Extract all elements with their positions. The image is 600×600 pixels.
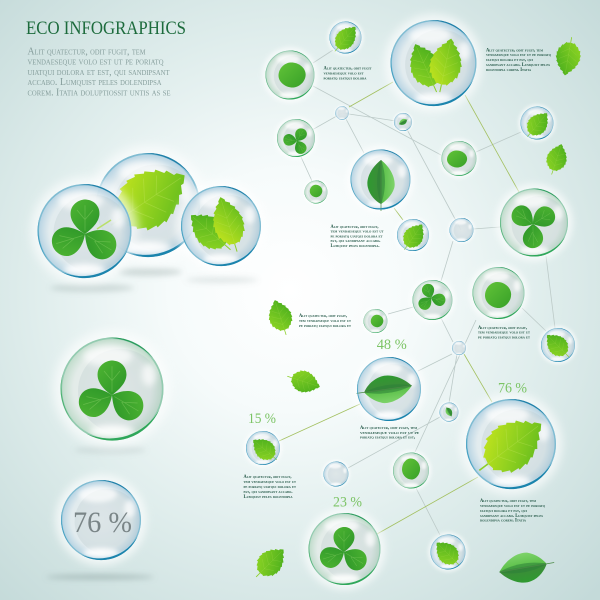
caption: under 48 percent: Alit quatectur, odit fugit, tem: [360, 426, 417, 431]
intro paragraph: corem. Itatia doluptiossit untis as se: [28, 87, 170, 98]
caption: under 76 percent: vendaeseque volo est ut pe poriatq: [480, 504, 546, 509]
free leaf: top right: [553, 35, 584, 78]
caption: top right: [486, 48, 552, 73]
caption: under 76 percent: sandipsant accabo. Lumquist peles: [480, 514, 543, 519]
intro paragraph: accabo. Lumquist peles dolendipsa: [28, 77, 162, 88]
network bubble: green leaf lower: [390, 450, 432, 491]
network bubble: small clover: [274, 116, 318, 160]
network bubble: lower leaf: [395, 217, 431, 255]
free leaf: bottom: [247, 541, 292, 586]
caption: top right: uiatqui dolora et est, qui: [486, 58, 534, 63]
connector lines: [279, 50, 555, 535]
bubble: right with two leaves: [175, 180, 267, 272]
caption: centre left: pe poriatq uiatqui dolora et: [299, 324, 351, 329]
caption: centre left: tem vendaeseque volo est ut: [299, 319, 351, 324]
caption: top right: sandipsant accabo. Lumquist peles: [486, 63, 550, 68]
caption: under 15 percent: est, qui sandipsant accabo.: [244, 490, 292, 495]
network node: hub: [451, 340, 467, 356]
caption: under 48 percent: [360, 426, 419, 440]
network bubble: small green middle: [362, 307, 389, 335]
caption: top right: dolendipsa corem. Itatia: [486, 68, 532, 73]
intro paragraph: uiatqui dolora et est, qui sandipsant: [28, 67, 170, 78]
network bubble: 76 percent birch leaf: [460, 393, 562, 495]
caption: under 15 percent: Lumquist peles dolendipsa: [244, 495, 293, 500]
intro paragraph: Alit quatectur, odit fugit, tem: [28, 46, 146, 58]
bubble: large clover: [53, 330, 171, 448]
caption: middle: Alit quatectur, odit fugit,: [330, 225, 378, 230]
caption: under 15 percent: tem vendaeseque volo est ut: [244, 480, 296, 485]
caption: under 76 percent: uiatqui dolora et est, qui: [480, 509, 528, 514]
network bubble: dark leaf: [346, 145, 415, 214]
network node: tiny empty: [334, 105, 350, 121]
intro paragraph: [28, 46, 170, 98]
caption: under 76 percent: [480, 499, 546, 524]
caption: middle: Lumquist peles dolendipsa.: [330, 244, 380, 249]
bubble: 76 percent: 76 %: [73, 506, 132, 539]
caption: top centre: [324, 66, 372, 82]
network bubble: small green: [303, 179, 329, 205]
caption: under 15 percent: [244, 475, 296, 500]
caption: under 48 percent: vendaeseque volo est ut pe: [360, 431, 419, 436]
caption: middle: tem vendaeseque volo est ut: [330, 230, 384, 234]
caption: centre left: [299, 314, 351, 329]
free leaf: centre: [264, 297, 297, 339]
network bubble: green leaf left: [262, 47, 318, 103]
network bubble: green blob leaf: [439, 139, 479, 178]
network bubble: 23 percent clover: [303, 508, 386, 590]
bubble: large back with birch leaf: [89, 146, 207, 264]
network bubble: bottom leaf: [428, 532, 468, 573]
caption: under 15 percent: pe poriatq uiatqui dolora et: [244, 485, 296, 490]
percent label: 48: 48 %: [377, 337, 407, 353]
percent label: 76: 76 %: [498, 380, 527, 396]
caption: centre right: [478, 326, 530, 340]
percent label: 23: 23 %: [333, 494, 362, 510]
caption: middle: [330, 225, 384, 249]
network bubble: right leaf: [518, 104, 556, 143]
intro paragraph: vendaeseque volo est ut pe poriatq: [28, 56, 164, 68]
title: ECO INFOGRAPHICS: [26, 19, 186, 39]
network bubble: right lower leaf: [539, 326, 577, 364]
network bubble: right clover: [495, 184, 573, 261]
caption: under 76 percent: Alit quatectur, odit fugit, tem: [480, 499, 536, 504]
caption: top right: Alit quatectur, odit fugit, tem: [486, 48, 543, 54]
network bubble: top small leaf: [327, 19, 364, 57]
caption: centre left: Alit quatectur, odit fugit,: [299, 314, 347, 319]
network bubble: mid clover: [410, 277, 455, 323]
caption: middle: est, qui sandipsant accabo.: [330, 239, 380, 244]
network bubble: tiny dark leaf lower: [438, 401, 460, 423]
caption: centre right: tem vendaeseque volo est ut: [478, 330, 530, 336]
network bubble: 48 percent dark leaf: [353, 353, 425, 425]
free leaf: horizontal: [284, 366, 323, 397]
percent label: 15: 15 %: [248, 411, 276, 427]
caption: top centre: Alit quatectur, odit fugit: [324, 66, 372, 72]
caption: top centre: vendaeseque volo est: [324, 72, 364, 76]
caption: centre right: Alit quatectur, odit fugit,: [478, 326, 527, 331]
caption: top right: vendaeseque volo est ut pe poriatq: [486, 53, 552, 58]
bubble: 76 percent: [55, 474, 147, 566]
caption: centre right: pe poriatq uiatqui dolora et: [478, 336, 530, 340]
caption: under 76 percent: dolendipsa corem. Itatia: [480, 518, 527, 524]
network bubble: tiny dark leaf: [393, 112, 413, 132]
free leaf: right: [542, 141, 571, 178]
ground shadows under left bubbles: [46, 268, 258, 580]
bubble: front left with clover: [31, 177, 138, 285]
caption: middle: pe poriatq uiatqui dolora et: [330, 234, 382, 240]
network bubble: green leaf middle: [469, 263, 528, 323]
caption: top centre: poriatq uiatqui dolora: [324, 76, 367, 82]
free leaf: dark bottom right: [497, 548, 557, 587]
caption: under 48 percent: poriatq uiatqui dolora et est,: [360, 436, 415, 440]
network bubble: large two leaves: [384, 14, 483, 112]
network node: empty: [448, 216, 475, 244]
network node: empty lower: [322, 460, 350, 488]
network bubble: 15 percent leaf: [244, 429, 283, 467]
caption: under 15 percent: Alit quatectur, odit fugit,: [244, 475, 292, 480]
